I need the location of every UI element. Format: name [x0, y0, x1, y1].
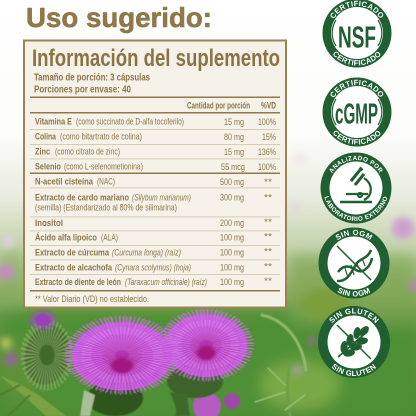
table column header: %VD	[261, 100, 276, 112]
row: vitamina E: Vitamina E	[35, 116, 72, 128]
badge: gluten free	[318, 306, 390, 378]
row: alcachofa: (Cynara scolymus) (hoja)	[115, 262, 191, 274]
icon: DNA helix	[337, 250, 372, 281]
row: inositol	[35, 217, 272, 229]
row: inositol: **	[264, 217, 272, 228]
row: vitamina E	[35, 116, 276, 128]
row: curcuma	[35, 246, 272, 258]
badge: external lab analysis	[320, 152, 392, 224]
thistle stems and calyxes	[80, 364, 223, 416]
serving info: Tamaño de porción: 3 cápsulas	[34, 72, 150, 84]
row: alcachofa: **	[264, 262, 272, 272]
row: colina: 80 mg	[224, 132, 244, 143]
row: selenio: 100%	[258, 162, 276, 173]
row: selenio: Selenio	[35, 162, 61, 172]
left thistle flower	[72, 321, 172, 390]
badge: external lab analysis: ANALIZADO POR	[330, 156, 383, 174]
row: alcachofa	[35, 262, 272, 274]
footnote: ** Valor Diario (VD) no establecido.	[35, 294, 149, 305]
badge: NSF certified: NSF	[338, 20, 376, 54]
panel heading: Información del suplemento	[32, 45, 280, 72]
row: colina: Colina	[35, 132, 57, 142]
row: zinc: (como citrato de zinc)	[55, 146, 120, 158]
row: diente de leon: **	[264, 276, 272, 287]
row: inositol: 200 mg	[220, 218, 244, 229]
row: curcuma: Extracto de cúrcuma	[35, 248, 110, 258]
row: vitamina E: (como succinato de D-alfa tocoferilo)	[76, 116, 184, 128]
row: cardo mariano: **	[264, 192, 272, 204]
row: cardo mariano: Extracto de cardo mariano	[35, 192, 129, 204]
row: N-acetil cisteina: 500 mg	[220, 177, 244, 188]
row: acido alfa lipoico: (ALA)	[101, 232, 118, 244]
serving info	[34, 72, 150, 96]
main heading: Uso sugerido:	[26, 2, 212, 33]
green bush behind badges	[299, 289, 351, 321]
row: colina	[35, 132, 276, 143]
serving info: Porciones por envase: 40	[34, 84, 131, 96]
badge: non-GMO: SIN OGM	[336, 230, 372, 240]
row: vitamina E: 100%	[258, 117, 276, 128]
row: acido alfa lipoico	[35, 232, 272, 244]
badge: external lab analysis: LABORATORIO EXTERNO	[324, 196, 388, 221]
row: curcuma: (Curcuma longa) (raíz)	[112, 248, 181, 258]
row: zinc	[35, 146, 276, 158]
row: alcachofa: 100 mg	[220, 262, 244, 274]
row: diente de leon: 100 mg	[220, 277, 244, 288]
row: selenio: 55 mcg	[221, 162, 245, 173]
badge: cGMP certified	[322, 78, 392, 146]
panel: supplement facts	[24, 40, 286, 308]
right stem and leaves	[255, 315, 306, 416]
left thistle bud	[0, 314, 75, 416]
row: colina: 15%	[262, 132, 276, 143]
row: selenio	[35, 162, 276, 173]
row: curcuma: **	[264, 246, 272, 258]
row: diente de leon	[35, 276, 272, 288]
badge: non-GMO: SIN OGM	[338, 288, 370, 296]
badge: NSF certified	[322, 0, 392, 68]
right thistle flower	[165, 314, 247, 377]
row: curcuma: 100 mg	[220, 248, 244, 258]
row: acido alfa lipoico: Ácido alfa lipoico	[35, 232, 97, 244]
icon: microscope	[340, 168, 372, 202]
badge: gluten free: SIN GLUTEN	[332, 364, 376, 376]
table column header: Cantidad por porción	[187, 100, 250, 112]
row: zinc: 15 mg	[224, 147, 244, 158]
row: zinc: 136%	[258, 147, 276, 158]
row: acido alfa lipoico: 100 mg	[220, 232, 244, 244]
row: N-acetil cisteina	[35, 176, 272, 188]
badge: NSF certified: CERTIFICADO	[333, 52, 380, 66]
row: diente de leon: (Taraxacum officinale) (raíz)	[125, 277, 207, 288]
icon: wheat	[338, 324, 371, 357]
badge: cGMP certified: CERTIFICADO	[330, 80, 384, 98]
row: N-acetil cisteina: **	[264, 177, 272, 188]
small purple flowers at the bottom	[193, 392, 240, 416]
row: N-acetil cisteina: N-acetil cisteína	[35, 176, 94, 188]
badge: cGMP certified: CERTIFICADO	[333, 130, 380, 144]
row: N-acetil cisteina: (NAC)	[97, 176, 115, 188]
row: alcachofa: Extracto de alcachofa	[35, 262, 113, 274]
row: inositol: Inositol	[35, 218, 63, 229]
row: colina: (como bitartrato de colina)	[60, 132, 142, 142]
row: cardo mariano	[35, 192, 272, 214]
row: selenio: (como L-selenometionina)	[64, 162, 143, 172]
row: zinc: Zinc	[35, 146, 50, 158]
badge: gluten free: SIN GLUTEN	[329, 308, 379, 323]
row: cardo mariano: (Silybum marianum)	[132, 192, 191, 204]
row: acido alfa lipoico: **	[264, 232, 272, 242]
row: diente de leon: Extracto de diente de león	[35, 277, 121, 288]
row: vitamina E: 15 mg	[224, 117, 244, 128]
badge: cGMP certified: cGMP	[335, 98, 378, 130]
row: cardo mariano: (semilla) (Estandarizado al 80% de silimarina)	[35, 202, 177, 214]
badge: non-GMO	[318, 228, 390, 298]
row: cardo mariano: 300 mg	[220, 192, 244, 204]
